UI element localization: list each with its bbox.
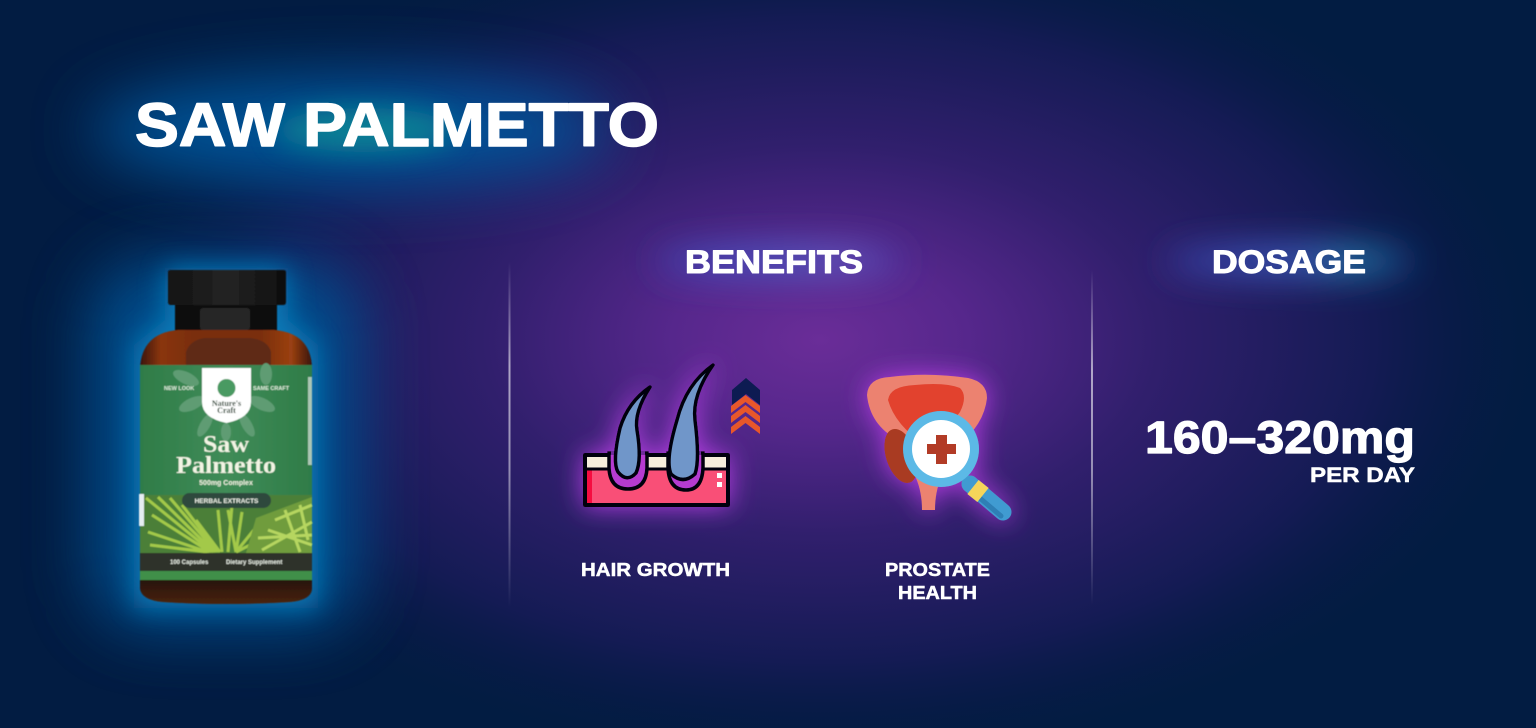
- product name: Saw: [203, 432, 250, 458]
- skin: [585, 455, 728, 505]
- skin pores: [717, 473, 722, 478]
- product bottle: SAME CRAFT: [253, 386, 290, 392]
- icon: growth arrows: [731, 378, 760, 434]
- product bottle: HERBAL EXTRACTS: [195, 498, 259, 505]
- dosage heading: DOSAGE: [1212, 244, 1366, 280]
- capsule text: 100 Capsules: [170, 560, 209, 566]
- brand mark: [218, 379, 236, 397]
- strength: 500mg Complex: [199, 480, 253, 487]
- follicle right: [668, 453, 703, 490]
- bottle neck: [175, 305, 277, 331]
- bottle label: [140, 365, 312, 555]
- capsule band: [140, 553, 312, 571]
- bottle base: [140, 578, 312, 604]
- benefits heading: BENEFITS: [685, 244, 863, 280]
- dosage amount: 160–320mg: [1145, 412, 1415, 463]
- bladder: [867, 375, 987, 480]
- bottle glass: [140, 330, 312, 604]
- label: prostate health: PROSTATE: [885, 560, 990, 580]
- prostate: [878, 425, 924, 487]
- bottle cap: [168, 270, 286, 305]
- divider left: [508, 262, 510, 607]
- product bottle: Craft: [217, 406, 236, 415]
- label: prostate health: HEALTH: [898, 583, 977, 603]
- divider right: [1091, 270, 1093, 605]
- product bottle: [139, 270, 312, 604]
- dosage unit: PER DAY: [1310, 464, 1415, 487]
- icon: hair growth: [585, 365, 728, 505]
- title: SAW PALMETTO: [135, 91, 659, 159]
- follicle top mask: [611, 451, 701, 455]
- product bottle: Palmetto: [176, 453, 276, 479]
- hair right: [669, 365, 713, 480]
- magnifier lens: [903, 411, 979, 487]
- benefits glow: [655, 247, 905, 275]
- label: hair growth: HAIR GROWTH: [581, 560, 730, 580]
- follicle left: [609, 453, 647, 489]
- brand tab: [202, 368, 251, 423]
- side panel: [308, 377, 312, 465]
- brand text: Nature's: [212, 399, 241, 408]
- herbal pill: [182, 493, 271, 508]
- label leaves: [171, 363, 277, 441]
- medical cross: [927, 435, 956, 464]
- icon: prostate health: [867, 375, 1003, 516]
- label tagline: NEW LOOK: [164, 386, 194, 392]
- bottle glow: [90, 260, 360, 630]
- label: prostate health: [885, 560, 990, 603]
- title glow: [90, 75, 610, 185]
- palm leaves: [140, 495, 312, 553]
- dosage glow: [1165, 247, 1415, 275]
- hair left: [615, 387, 650, 478]
- product bottle: Dietary Supplement: [226, 560, 282, 566]
- urethra: [916, 478, 941, 510]
- magnifier handle: [970, 484, 1003, 516]
